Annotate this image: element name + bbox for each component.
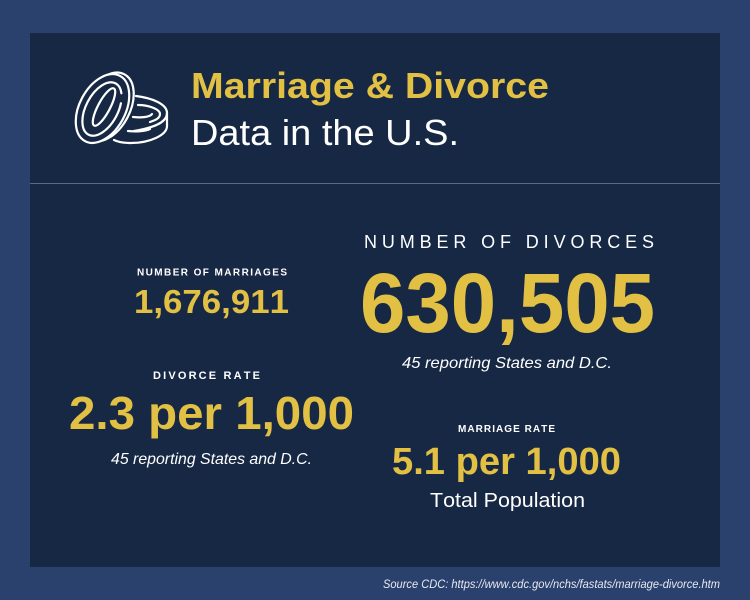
value: 630,505 [360, 256, 655, 350]
header divider [30, 183, 720, 184]
label: NUMBER OF DIVORCES [364, 232, 654, 252]
icon: wedding rings [65, 64, 167, 152]
label: MARRIAGE RATE [458, 424, 555, 435]
value: 5.1 per 1,000 [392, 441, 621, 483]
title line 1: Marriage & Divorce [191, 65, 549, 106]
label: NUMBER OF MARRIAGES [137, 268, 287, 278]
title line 2: Data in the U.S. [191, 112, 459, 153]
note: 45 reporting States and D.C. [111, 451, 312, 468]
value: 2.3 per 1,000 [69, 387, 354, 439]
title [191, 65, 549, 153]
value: 1,676,911 [134, 284, 289, 321]
source note: Source CDC: https://www.cdc.gov/nchs/fastats/marriage-divorce.htm [383, 579, 720, 591]
stat: divorce rate [69, 370, 354, 468]
note: 45 reporting States and D.C. [402, 355, 612, 372]
stat: number of divorces [360, 232, 655, 372]
stat: number of marriages [134, 268, 289, 321]
note: Total Population [430, 489, 585, 512]
stat: marriage rate [392, 424, 621, 512]
label: DIVORCE RATE [153, 370, 260, 382]
